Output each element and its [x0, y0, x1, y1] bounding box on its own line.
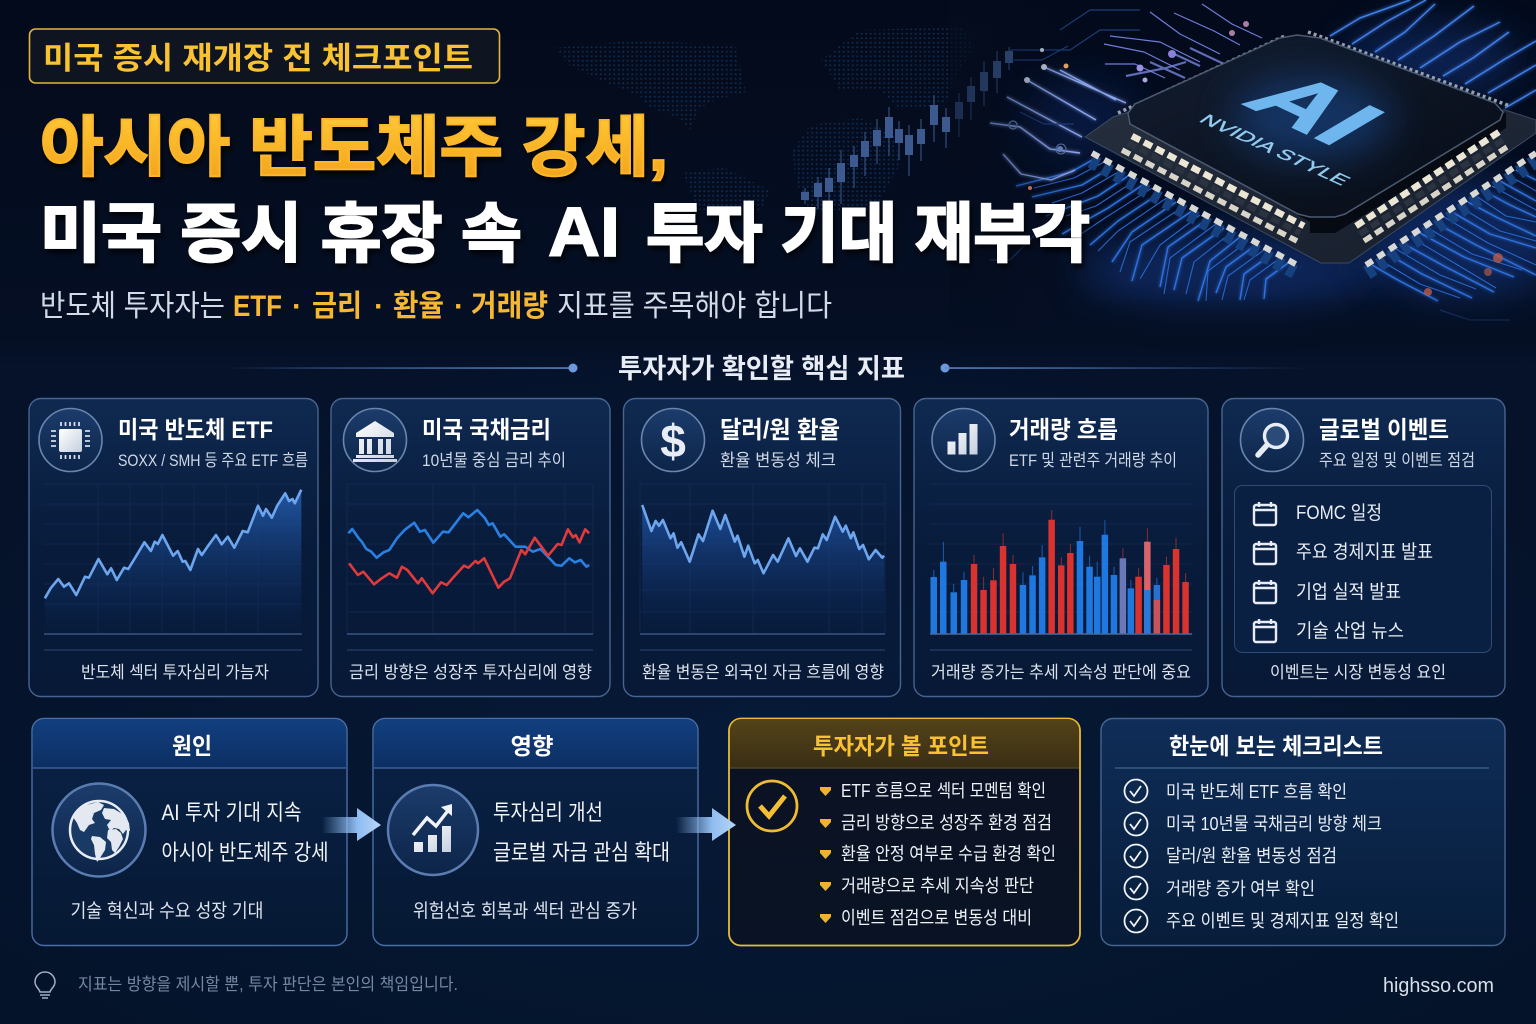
line chart: treasury yield — [347, 484, 593, 634]
line chart: ETF trend — [44, 484, 302, 634]
chip label: AI: AI — [1223, 61, 1406, 158]
title — [40, 110, 1090, 271]
list: investor points — [820, 781, 1056, 928]
caption: 위험선호 회복과 섹터 관심 증가 — [413, 900, 637, 922]
line chart: exchange rate — [640, 484, 885, 634]
list: checklist items: 미국 10년물 국채금리 방향 체크 — [1166, 814, 1382, 834]
panel: trading volume — [914, 398, 1208, 696]
panel: USD/KRW exchange rate — [624, 398, 900, 696]
subheading: 환율 변동성 체크 — [720, 451, 836, 470]
subtitle: · — [374, 290, 384, 323]
icon: light bulb — [35, 972, 55, 998]
panel: impact — [373, 718, 698, 946]
heading: 달러/원 환율 — [720, 417, 840, 444]
top tag: checkpoint label: 미국 증시 재개장 전 체크포인트 — [43, 41, 473, 76]
panel: checklist — [1101, 718, 1505, 946]
subtitle: 반도체 투자자는 — [40, 290, 225, 323]
heading: 미국 국채금리 — [422, 417, 551, 444]
pins along upper edges — [1118, 32, 1510, 113]
subtitle: ETF — [233, 290, 282, 323]
background: dotted world map — [554, 27, 975, 212]
inner pins — [1122, 132, 1507, 241]
chip top face — [1128, 35, 1503, 217]
subheading: SOXX / SMH 등 주요 ETF 흐름 — [118, 451, 308, 470]
list: investor points: 거래량으로 추세 지속성 판단 — [841, 876, 1034, 896]
text: AI investment expectation: AI 투자 기대 지속 — [162, 800, 302, 825]
subheading: 10년물 중심 금리 추이 — [422, 451, 566, 470]
item: FOMC — [1254, 502, 1382, 525]
footer: disclaimer — [35, 972, 458, 998]
icon: bars — [932, 408, 995, 472]
icon: dollar: $ — [660, 415, 686, 467]
subtitle: 지표를 주목해야 합니다 — [557, 290, 832, 323]
footer: disclaimer: 지표는 방향을 제시할 뿐, 투자 판단은 본인의 책임입니다. — [78, 975, 458, 994]
caption: 환율 변동은 외국인 자금 흐름에 영향 — [642, 663, 884, 682]
item: earnings: 기업 실적 발표 — [1296, 581, 1401, 603]
heading: 거래량 흐름 — [1009, 417, 1118, 444]
heading: 한눈에 보는 체크리스트 — [1169, 733, 1383, 759]
list: checklist items: 달러/원 환율 변동성 점검 — [1166, 846, 1337, 866]
caption: 금리 방향은 성장주 투자심리에 영향 — [349, 663, 592, 682]
list: checklist items — [1124, 780, 1399, 932]
heading: 원인 — [172, 733, 212, 759]
list: investor points: 이벤트 점검으로 변동성 대비 — [841, 908, 1032, 928]
panel: global events — [1222, 398, 1505, 696]
subtitle: 금리 — [312, 290, 362, 323]
item: tech news: 기술 산업 뉴스 — [1296, 620, 1404, 642]
icon: chip — [39, 408, 102, 472]
subtitle: · — [292, 290, 302, 323]
icon: globe — [52, 784, 146, 876]
chip side — [1126, 112, 1506, 233]
item: earnings — [1254, 580, 1401, 603]
title: 아시아 반도체주 강세, — [40, 110, 668, 184]
item: tech news — [1254, 619, 1404, 642]
panel: investor points — [729, 718, 1080, 946]
item: economic indicators — [1254, 541, 1433, 564]
text: Asia semiconductor strength: 아시아 반도체주 강세 — [162, 840, 328, 865]
icon: gold check — [747, 781, 797, 831]
subtitle: · — [454, 290, 464, 323]
icon: growth chart — [388, 785, 478, 875]
arrow: impact to investor points — [676, 808, 736, 841]
list: investor points: ETF 흐름으로 섹터 모멘텀 확인 — [841, 781, 1046, 801]
heading: 글로벌 이벤트 — [1319, 417, 1449, 444]
icon: dollar — [642, 408, 704, 472]
subheading: 주요 일정 및 이벤트 점검 — [1319, 451, 1475, 470]
icon: bank — [344, 408, 406, 472]
chip label: NVIDIA STYLE: NVIDIA STYLE — [1195, 111, 1355, 188]
list box: event schedule — [1234, 486, 1492, 652]
icon: magnifier — [1240, 408, 1304, 472]
arrow: cause to impact — [322, 808, 381, 841]
circuit traces — [990, 0, 1536, 320]
title: 미국 증시 휴장 속 — [40, 197, 522, 270]
list: investor points: 금리 방향으로 성장주 환경 점검 — [841, 813, 1052, 833]
subheading: ETF 및 관련주 거래량 추이 — [1009, 451, 1177, 470]
text: global capital interest: 글로벌 자금 관심 확대 — [493, 840, 670, 865]
hero image: AI chip on circuit board — [990, 0, 1536, 320]
list: checklist items: 미국 반도체 ETF 흐름 확인 — [1166, 782, 1347, 802]
heading: 영향 — [510, 733, 554, 759]
item: economic indicators: 주요 경제지표 발표 — [1296, 541, 1433, 563]
bar chart: volume — [930, 484, 1192, 634]
panel: cause — [32, 718, 347, 946]
top tag: checkpoint label — [30, 29, 500, 83]
section heading: key indicators — [225, 354, 1310, 384]
subtitle: 거래량 — [471, 290, 548, 323]
outer pins — [1091, 153, 1536, 275]
caption: 반도체 섹터 투자심리 가늠자 — [81, 663, 269, 682]
footer: site name: highsso.com — [1383, 975, 1494, 997]
heading: 미국 반도체 ETF — [118, 417, 273, 444]
panel: US semiconductor ETF — [29, 398, 318, 696]
background: candlestick trend — [801, 47, 1013, 209]
section heading: key indicators: 투자자가 확인할 핵심 지표 — [618, 354, 905, 384]
subtitle: 환율 — [393, 290, 444, 323]
list: checklist items: 주요 이벤트 및 경제지표 일정 확인 — [1166, 911, 1399, 931]
list: checklist items: 거래량 증가 여부 확인 — [1166, 879, 1315, 899]
caption: 기술 혁신과 수요 성장 기대 — [70, 900, 264, 922]
title: AI — [548, 193, 620, 271]
list: investor points: 환율 안정 여부로 수급 환경 확인 — [841, 844, 1056, 864]
heading: 투자자가 볼 포인트 — [813, 733, 989, 759]
subtitle — [40, 290, 832, 323]
caption: 이벤트는 시장 변동성 요인 — [1270, 663, 1446, 682]
text: sentiment improves: 투자심리 개선 — [493, 800, 603, 825]
panel: US treasury yield — [331, 398, 610, 696]
caption: 거래량 증가는 추세 지속성 판단에 중요 — [931, 663, 1191, 682]
chip base — [1085, 110, 1536, 263]
item: FOMC: FOMC 일정 — [1296, 502, 1382, 524]
title: 투자 기대 재부각 — [646, 197, 1090, 270]
circuit glow — [1020, 25, 1536, 310]
